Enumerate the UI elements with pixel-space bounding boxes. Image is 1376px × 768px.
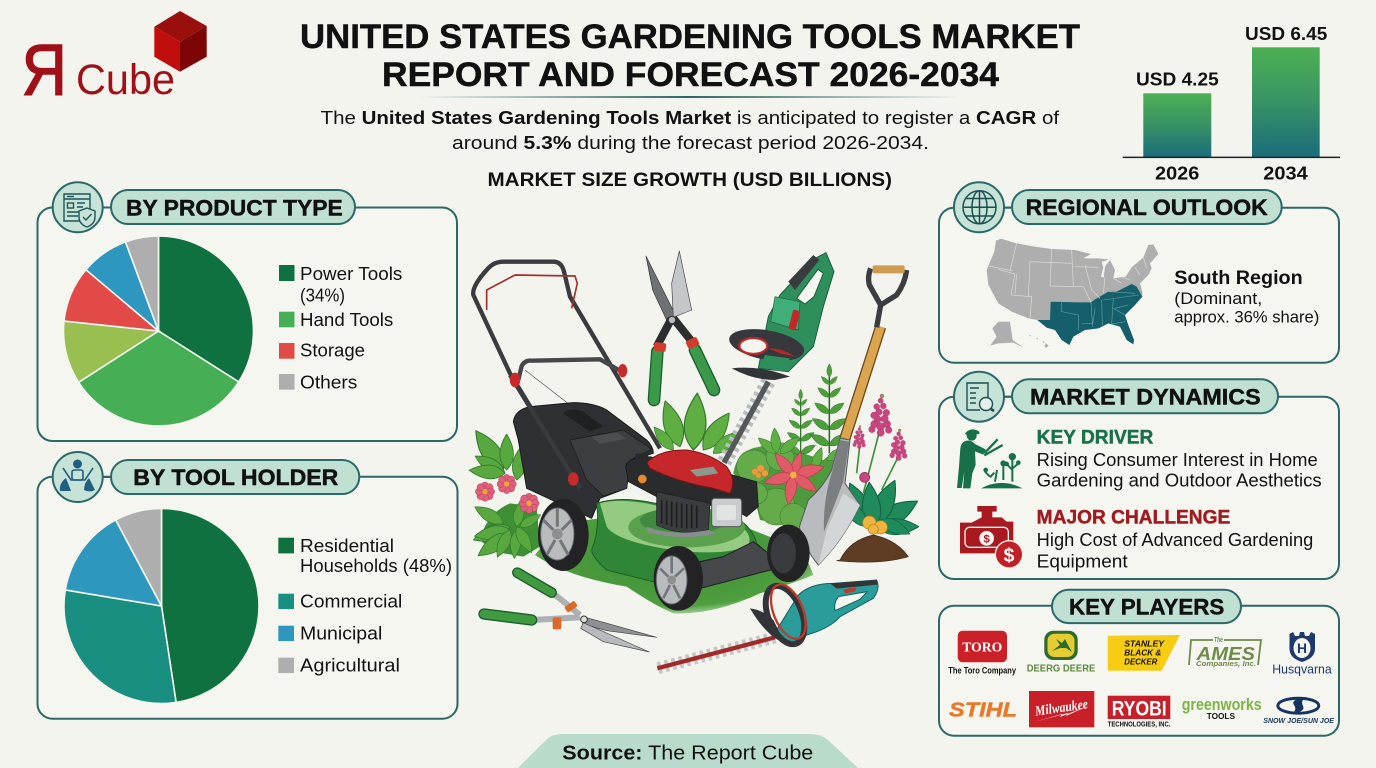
heading: by product type: BY PRODUCT TYPE xyxy=(126,196,343,221)
logo: Ryobi: TECHNOLOGIES, INC. xyxy=(1108,720,1170,729)
text: major challenge: High Cost of Advanced Gardening xyxy=(1037,530,1313,550)
legend: product type: (34%) xyxy=(300,286,345,306)
panel: key players xyxy=(939,590,1339,736)
panel: by tool holder xyxy=(38,452,458,719)
legend: tool holder: Households (48%) xyxy=(300,556,452,576)
legend: tool holder xyxy=(278,536,452,675)
heading: market dynamics: MARKET DYNAMICS xyxy=(1030,384,1261,409)
top pruning shears xyxy=(646,251,714,400)
text: major challenge: Equipment xyxy=(1037,551,1128,571)
center grass leaves xyxy=(650,392,743,458)
bar chart: market size: 2026 xyxy=(1155,163,1199,183)
bar chart: market size: USD 6.45 xyxy=(1245,24,1327,44)
logo: Stanley Black & Decker: BLACK & xyxy=(1124,648,1161,658)
logo: Ames: Companies, Inc. xyxy=(1196,659,1256,668)
source banner: Source: The Report Cube xyxy=(562,742,813,764)
heading: by tool holder xyxy=(111,460,359,494)
logo: Stanley Black & Decker xyxy=(1108,635,1180,671)
legend: tool holder: Municipal xyxy=(300,623,382,643)
logo: Я xyxy=(22,30,67,110)
logo: Toro xyxy=(948,631,1016,676)
logo: Deere xyxy=(1027,631,1095,675)
lopper shears xyxy=(484,573,657,652)
lawn mower xyxy=(473,262,810,611)
text: south region xyxy=(1174,268,1319,327)
icon: tool holder person with bags xyxy=(53,452,111,502)
grass ground xyxy=(535,507,813,613)
logo: Stanley Black & Decker: STANLEY xyxy=(1124,639,1165,649)
icon: money challenge xyxy=(960,506,1023,569)
legend: tool holder: Residential xyxy=(300,536,394,556)
text: south region: (Dominant, xyxy=(1174,290,1262,308)
icon: globe xyxy=(954,182,1012,232)
heading: by product type xyxy=(111,190,355,224)
icon: money challenge: $ xyxy=(1004,545,1015,566)
legend: product type: Storage xyxy=(300,341,365,361)
logo: Stihl: STIHL xyxy=(949,700,1017,722)
text: major challenge: MAJOR CHALLENGE xyxy=(1037,508,1230,529)
title xyxy=(300,18,1080,94)
text: key driver: KEY DRIVER xyxy=(1037,427,1154,448)
heading: key players xyxy=(1052,590,1241,623)
legend: product type xyxy=(279,264,402,392)
panel: by product type xyxy=(38,182,457,441)
legend: tool holder: Agricultural xyxy=(300,655,400,675)
logo: Ames: The xyxy=(1214,635,1223,644)
logo: Cube xyxy=(76,56,175,104)
text: key driver: Gardening and Outdoor Aesthetics xyxy=(1037,471,1322,491)
icon: money challenge: $ xyxy=(984,533,991,545)
logo: Ryobi: RYOBI xyxy=(1112,698,1167,721)
title: UNITED STATES GARDENING TOOLS MARKET xyxy=(300,18,1080,56)
legend: product type: Power Tools xyxy=(300,264,402,284)
icon: report with magnifier xyxy=(954,372,1012,422)
logo: Ames: AMES xyxy=(1196,644,1255,664)
panel: market dynamics xyxy=(939,372,1339,579)
logo: Greenworks: greenworks xyxy=(1182,695,1262,714)
map: United States with South highlighted xyxy=(987,239,1158,348)
logo: Husqvarna xyxy=(1272,632,1332,676)
logo: Milwaukee: Milwaukee xyxy=(1033,697,1089,720)
logo: Husqvarna: H xyxy=(1297,640,1307,656)
logo: Snow Joe: SNOW JOE/SUN JOE xyxy=(1263,716,1335,725)
text: key driver: Rising Consumer Interest in Home xyxy=(1037,450,1318,470)
logo: Stanley Black & Decker: DECKER xyxy=(1124,656,1158,666)
icon: product document with shield xyxy=(53,182,111,232)
heading: market dynamics xyxy=(1012,379,1278,413)
legend: tool holder: Commercial xyxy=(300,592,402,612)
pie chart: tool holder xyxy=(64,508,259,704)
legend: product type: Hand Tools xyxy=(300,310,393,330)
text: major challenge xyxy=(1037,508,1313,571)
pie chart: product type xyxy=(63,236,253,426)
bar chart: market size xyxy=(1123,24,1340,183)
panel: regional outlook xyxy=(939,182,1339,363)
logo: Ryobi xyxy=(1108,696,1170,729)
logo: Toro: TORO xyxy=(962,641,1002,656)
source banner xyxy=(518,734,858,768)
shovel xyxy=(799,265,907,565)
logo: Toro: The Toro Company xyxy=(948,666,1016,676)
heading: regional outlook xyxy=(1012,190,1282,224)
text: key driver xyxy=(1037,427,1322,491)
text: south region: approx. 36% share) xyxy=(1174,309,1319,327)
logo: Ames xyxy=(1189,635,1261,668)
left plants xyxy=(468,425,543,562)
icon: gardener with shears xyxy=(957,429,1022,488)
logo: Deere: DEERG DEERE xyxy=(1027,663,1095,675)
text: south region: South Region xyxy=(1174,268,1303,289)
logo: Husqvarna: Husqvarna xyxy=(1272,661,1332,676)
logo: Greenworks xyxy=(1182,695,1262,721)
upper hedge trimmer xyxy=(724,253,834,463)
subtitle xyxy=(321,107,1060,153)
chart heading: MARKET SIZE GROWTH (USD BILLIONS) xyxy=(488,170,892,191)
logo: Snow Joe xyxy=(1263,697,1335,725)
subtitle: around 5.3% during the forecast period 2026-2034. xyxy=(452,132,929,153)
logo: Greenworks: TOOLS xyxy=(1207,711,1235,721)
right plants xyxy=(733,364,922,562)
heading: by tool holder: BY TOOL HOLDER xyxy=(133,465,338,490)
lower hedge trimmer xyxy=(657,580,878,668)
title: REPORT AND FORECAST 2026-2034 xyxy=(382,56,999,94)
bar chart: market size: USD 4.25 xyxy=(1136,69,1219,89)
bar chart: market size: 2034 xyxy=(1263,163,1308,183)
subtitle: The United States Gardening Tools Market is anticipated to register a CAGR of xyxy=(321,107,1060,128)
logo: Milwaukee xyxy=(1029,691,1094,727)
illustration: gardening tools xyxy=(468,251,922,668)
legend: product type: Others xyxy=(300,372,357,392)
heading: key players: KEY PLAYERS xyxy=(1069,594,1224,619)
logo xyxy=(22,11,207,110)
heading: regional outlook: REGIONAL OUTLOOK xyxy=(1026,195,1268,220)
